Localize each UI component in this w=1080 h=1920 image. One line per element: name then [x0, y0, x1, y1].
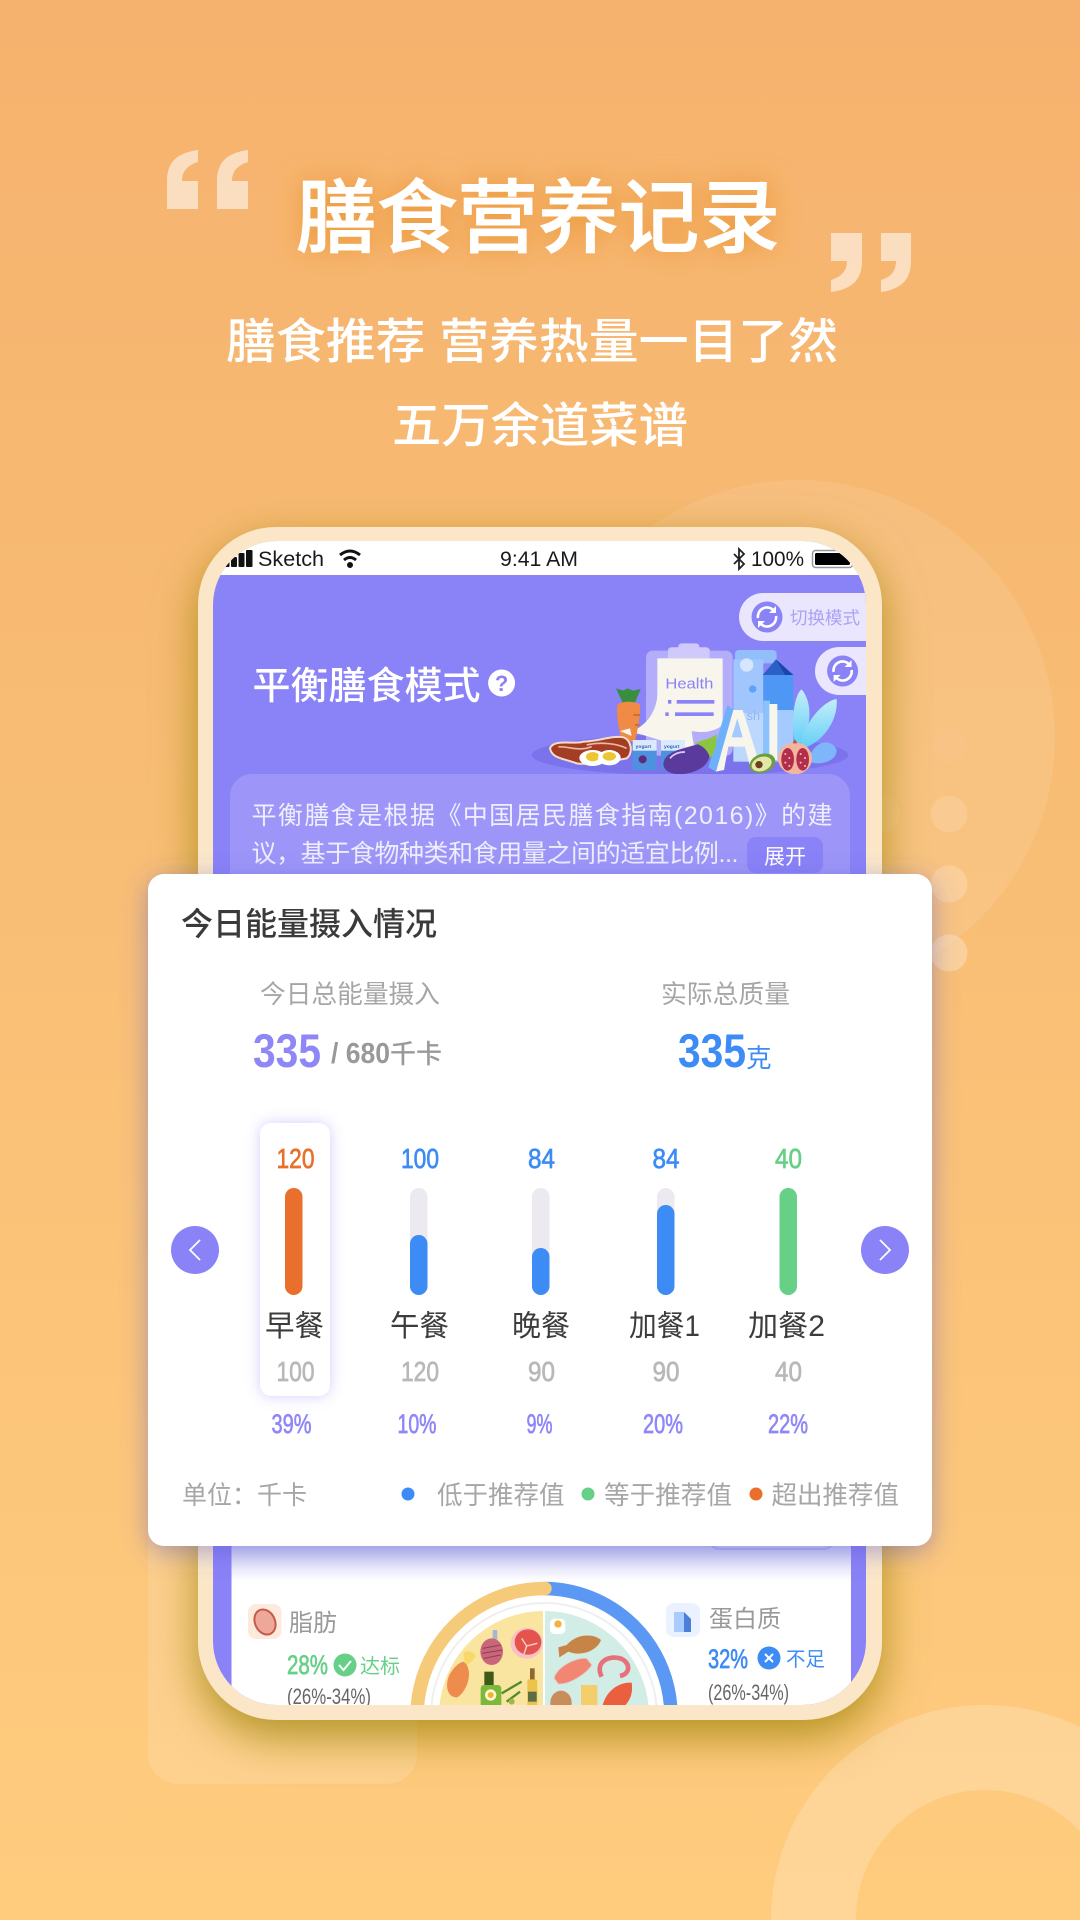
decoration: large circle — [541, 480, 1055, 994]
subtitle line 2: 五万余道菜谱 — [392, 400, 688, 453]
oil bottle — [527, 1668, 537, 1709]
protein status: 不足 — [786, 1649, 825, 1671]
cross icon — [758, 1646, 780, 1670]
fat icon — [248, 1604, 282, 1639]
column: snack 1: 90 — [652, 1356, 680, 1387]
battery — [812, 550, 852, 568]
phone shadow — [198, 542, 882, 1737]
fried egg — [550, 1619, 565, 1634]
column: breakfast: 早餐 — [265, 1310, 324, 1343]
highlight box shadow — [260, 1123, 330, 1396]
plate food — [447, 1619, 632, 1715]
wifi icon — [340, 551, 360, 566]
fat ring — [417, 1588, 545, 1716]
decoration: bottom ring — [771, 1705, 1080, 1920]
column: dinner: 84 — [528, 1143, 555, 1174]
macro half-circle chart — [410, 1582, 678, 1705]
pomegranate — [778, 739, 812, 774]
paper — [636, 658, 723, 748]
title glow: 膳食营养记录 — [296, 174, 780, 263]
protein label: 蛋白质 — [709, 1606, 781, 1633]
protein range: (26%-34%) — [708, 1680, 789, 1705]
battery percent: 100% — [751, 548, 804, 571]
highlight box — [260, 1123, 330, 1396]
milk icon — [666, 1603, 700, 1637]
egg — [550, 1691, 572, 1715]
right arrow — [861, 1226, 909, 1274]
subtitle line 1: 膳食推荐 营养热量一目了然 — [226, 316, 838, 369]
help icon: ? — [495, 671, 508, 696]
total energy block: / 680 — [331, 1038, 390, 1070]
description line 1: 平衡膳食是根据《中国居民膳食指南(2016)》的建 — [252, 802, 832, 830]
protein value: 32% — [708, 1644, 748, 1674]
sync icon — [752, 602, 782, 632]
phone frame — [198, 527, 882, 1720]
fat legend — [248, 1604, 400, 1709]
column: lunch: 10% — [398, 1409, 436, 1439]
column: lunch — [390, 1143, 449, 1439]
total energy block: 今日总能量摄入 — [260, 981, 440, 1009]
legend: 低于推荐值 — [437, 1482, 564, 1510]
quote mark: right — [831, 233, 911, 292]
decoration: dots — [864, 728, 968, 972]
legend: 超出推荐值 — [772, 1482, 899, 1510]
ground ellipse — [532, 734, 848, 776]
milk carton — [733, 650, 793, 762]
signal bars — [224, 550, 252, 567]
illustration: health food — [532, 643, 848, 777]
total mass block — [661, 981, 790, 1077]
column: snack 2: 40 — [775, 1143, 802, 1174]
column: dinner — [512, 1143, 570, 1439]
total mass block: 克 — [746, 1045, 772, 1073]
yogurt cups: yogurt — [664, 744, 680, 750]
eggplant — [663, 734, 717, 774]
paper: Health — [665, 677, 713, 693]
description line 2: 议，基于食物种类和食用量之间的适宜比例... — [252, 840, 738, 868]
column: snack 1: 加餐1 — [629, 1310, 700, 1343]
ham — [480, 1630, 503, 1665]
switch mode pill — [739, 593, 866, 641]
avocado — [749, 754, 776, 774]
column: breakfast: 100 — [276, 1356, 314, 1387]
expand button — [747, 837, 823, 873]
drumstick — [447, 1651, 475, 1697]
plate — [440, 1611, 543, 1705]
column: breakfast: 39% — [272, 1409, 312, 1439]
column: lunch: 100 — [401, 1143, 439, 1174]
bluetooth icon — [734, 549, 744, 569]
card title: 今日能量摄入情况 — [181, 906, 437, 942]
status bar — [213, 541, 866, 575]
carrot — [616, 688, 641, 742]
legend: 等于推荐值 — [604, 1482, 732, 1510]
fat value: 28% — [287, 1650, 328, 1680]
check icon — [334, 1654, 356, 1676]
box — [581, 1685, 597, 1710]
total energy block — [253, 981, 442, 1077]
yogurt cups — [633, 740, 685, 770]
fish — [558, 1635, 601, 1657]
column: snack 1: 20% — [643, 1409, 683, 1439]
title: 膳食营养记录 — [296, 174, 780, 263]
decoration: rounded block — [148, 1400, 417, 1784]
red steak — [511, 1628, 543, 1659]
milk carton: sh — [747, 709, 760, 723]
column: snack 1 — [629, 1143, 700, 1439]
switch label: 切换模式 — [790, 608, 860, 628]
column: breakfast: 120 — [276, 1143, 314, 1174]
fat range: (26%-34%) — [287, 1684, 371, 1709]
column: lunch: 午餐 — [390, 1310, 449, 1343]
energy card — [148, 874, 932, 1546]
column: snack 2: 加餐2 — [748, 1310, 825, 1343]
clock: 9:41 AM — [500, 548, 578, 571]
expand button: 展开 — [764, 846, 806, 869]
column: dinner: 90 — [528, 1356, 555, 1387]
column: snack 2: 22% — [768, 1409, 808, 1439]
steak and eggs — [550, 737, 631, 766]
column: snack 1: 84 — [652, 1143, 680, 1174]
total energy block: 335 — [253, 1024, 321, 1077]
column: snack 2: 40 — [775, 1356, 802, 1387]
total mass block: 335 — [678, 1024, 746, 1077]
fat label: 脂肪 — [289, 1610, 337, 1637]
mode heading: 平衡膳食模式 — [252, 666, 480, 708]
salmon steak — [554, 1658, 592, 1684]
unit label: 单位：千卡 — [182, 1482, 307, 1510]
lower white panel — [232, 1546, 851, 1705]
legend — [402, 1482, 899, 1510]
column: dinner: 9% — [526, 1409, 552, 1439]
shrimp — [600, 1658, 628, 1677]
fat status: 达标 — [360, 1655, 400, 1678]
carrier: Sketch — [258, 548, 324, 571]
help icon — [488, 670, 515, 696]
salmon fillet — [603, 1683, 632, 1712]
column: breakfast — [265, 1143, 324, 1439]
olive oil — [481, 1672, 522, 1712]
switch mini pill — [815, 647, 866, 695]
clipboard — [646, 643, 733, 756]
protein legend — [666, 1603, 825, 1705]
phone screen — [213, 541, 866, 1705]
yogurt cups: yogurt — [636, 744, 652, 750]
card shadow — [148, 880, 932, 1552]
protein ring — [544, 1588, 671, 1716]
total energy block: 千卡 — [390, 1039, 442, 1069]
description panel — [230, 774, 850, 874]
column: snack 2 — [748, 1143, 825, 1439]
leaves — [793, 689, 837, 763]
total mass block: 实际总质量 — [661, 981, 790, 1009]
column: lunch: 120 — [401, 1356, 439, 1387]
left arrow — [171, 1226, 219, 1274]
quote mark: left — [167, 150, 248, 209]
letters AI — [708, 701, 777, 772]
column: dinner: 晚餐 — [512, 1310, 570, 1343]
screen purple background — [213, 541, 866, 1705]
